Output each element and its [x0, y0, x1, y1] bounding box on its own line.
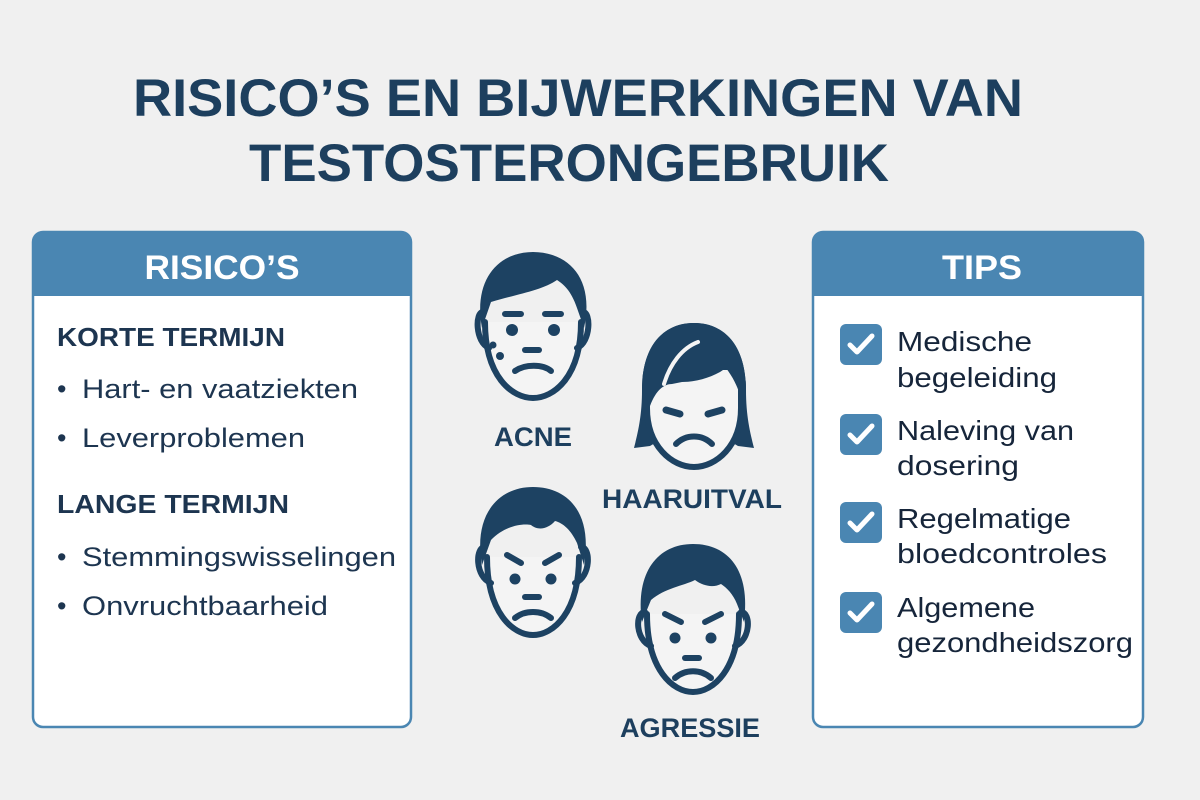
text block: korte termijn: •: [57, 374, 66, 404]
title: [133, 69, 1023, 193]
icon: haaruitval face: [634, 323, 754, 467]
icon: acne face: [478, 252, 588, 398]
panel: risico's: [33, 232, 411, 727]
tip 2: Naleving van: [897, 415, 1074, 446]
tip 2: dosering: [897, 450, 1019, 481]
tip 4: Algemene: [897, 592, 1035, 623]
panel header: tips: [813, 232, 1143, 296]
text block: korte termijn: Hart- en vaatziekten: [82, 374, 358, 404]
tip 3: Regelmatige: [897, 503, 1071, 534]
panel header: tips: TIPS: [942, 249, 1022, 287]
tip 1: Medische: [897, 326, 1032, 357]
tip 3: bloedcontroles: [897, 538, 1107, 569]
panel header: risico's: [33, 232, 411, 296]
label: haaruitval: HAARUITVAL: [602, 484, 782, 514]
text block: lange termijn: [57, 489, 396, 621]
text block: korte termijn: Leverproblemen: [82, 423, 305, 453]
text block: lange termijn: LANGE TERMIJN: [57, 489, 289, 519]
text block: korte termijn: •: [57, 423, 66, 453]
text block: lange termijn: •: [57, 591, 66, 621]
title: TESTOSTERONGEBRUIK: [249, 134, 889, 193]
tip 1: [840, 324, 1057, 393]
panel: tips: [813, 232, 1143, 727]
tip 4: [840, 592, 1133, 658]
label: agressie: AGRESSIE: [620, 713, 760, 743]
icon: agressie face: [638, 544, 748, 692]
text block: lange termijn: Stemmingswisselingen: [82, 542, 396, 572]
text block: lange termijn: •: [57, 542, 66, 572]
tip 2: [840, 414, 1074, 481]
tip 3: [840, 502, 1107, 569]
icon: angry face: [478, 487, 588, 635]
title: RISICO’S EN BIJWERKINGEN VAN: [133, 69, 1023, 128]
text block: korte termijn: KORTE TERMIJN: [57, 322, 285, 352]
text block: lange termijn: Onvruchtbaarheid: [82, 591, 328, 621]
panel header: risico's: RISICO’S: [144, 249, 300, 287]
tip 4: gezondheidszorg: [897, 627, 1133, 658]
label: acne: ACNE: [494, 422, 572, 452]
tip 1: begeleiding: [897, 362, 1057, 393]
text block: korte termijn: [57, 322, 358, 453]
